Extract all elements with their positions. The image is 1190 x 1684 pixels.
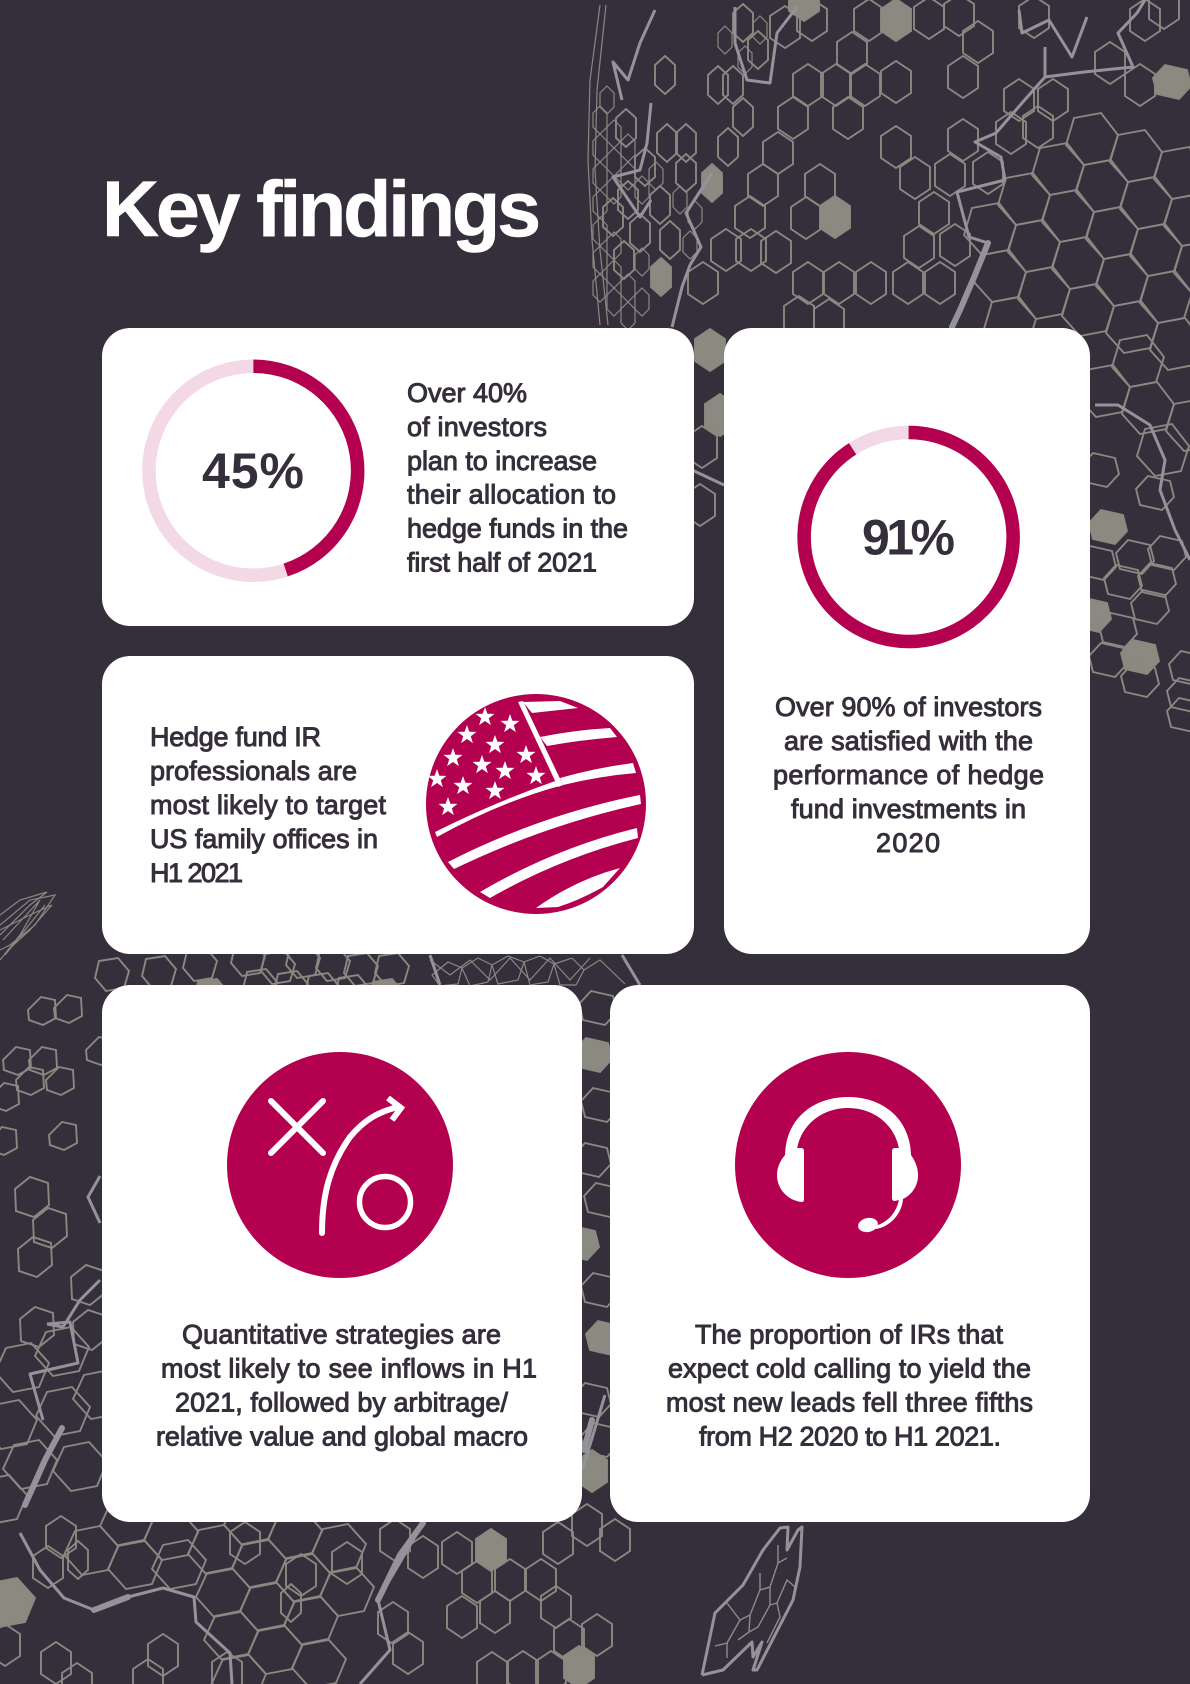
panel: US family offices	[102, 656, 694, 954]
text: investors plan to increase allocation: of investors	[407, 412, 547, 442]
text: IR professionals target US family offices: H1 2021	[150, 858, 243, 888]
donut chart: 91%	[804, 432, 1013, 642]
text: investors satisfied with performance: performance of hedge	[773, 760, 1044, 790]
panel: cold calling	[610, 985, 1090, 1522]
text: investors satisfied with performance: Over 90% of investors	[775, 692, 1042, 722]
text: quantitative strategies inflows: Quantitative strategies are	[182, 1320, 501, 1350]
text: investors satisfied with performance	[773, 692, 1044, 858]
text: investors plan to increase allocation: hedge funds in the	[407, 514, 628, 544]
text: investors satisfied with performance: are satisfied with the	[784, 726, 1033, 756]
text: cold calling proportion fell: most new leads fell three fifths	[666, 1388, 1033, 1418]
text: investors plan to increase allocation: first half of 2021	[407, 548, 597, 578]
donut chart: 91%: 91%	[862, 510, 955, 566]
text: quantitative strategies inflows	[156, 1320, 537, 1452]
donut chart: 45%	[149, 366, 358, 575]
text: quantitative strategies inflows: most likely to see inflows in H1	[161, 1354, 537, 1384]
text: investors plan to increase allocation	[407, 378, 628, 578]
text: IR professionals target US family offices: professionals are	[150, 756, 357, 786]
text: investors plan to increase allocation: Over 40%	[407, 378, 527, 408]
panel: 45% of investors	[102, 328, 694, 626]
icon: US flag globe	[426, 694, 646, 914]
text: IR professionals target US family offices: Hedge fund IR	[150, 722, 321, 752]
text: cold calling proportion fell: The proportion of IRs that	[695, 1320, 1003, 1350]
icon: strategy play	[227, 1052, 453, 1278]
text: cold calling proportion fell: expect cold calling to yield the	[668, 1354, 1031, 1384]
text: investors plan to increase allocation: plan to increase	[407, 446, 597, 476]
text: quantitative strategies inflows: 2021, followed by arbitrage/	[175, 1388, 508, 1418]
title: Key findings	[102, 164, 541, 253]
text: IR professionals target US family offices: most likely to target	[150, 790, 386, 820]
text: IR professionals target US family offices: US family offices in	[150, 824, 378, 854]
text: cold calling proportion fell: from H2 2020 to H1 2021.	[699, 1422, 1001, 1452]
text: quantitative strategies inflows: relative value and global macro	[156, 1422, 528, 1452]
panel: quantitative strategies	[102, 985, 582, 1522]
donut chart: 45%: 45%	[202, 443, 304, 499]
panel: 91% satisfied	[724, 328, 1090, 954]
text: investors satisfied with performance: 2020	[876, 828, 940, 858]
text: investors plan to increase allocation: their allocation to	[407, 480, 616, 510]
text: IR professionals target US family offices	[150, 722, 386, 888]
text: cold calling proportion fell	[666, 1320, 1033, 1452]
text: investors satisfied with performance: fund investments in	[791, 794, 1026, 824]
icon: headset	[735, 1052, 961, 1278]
